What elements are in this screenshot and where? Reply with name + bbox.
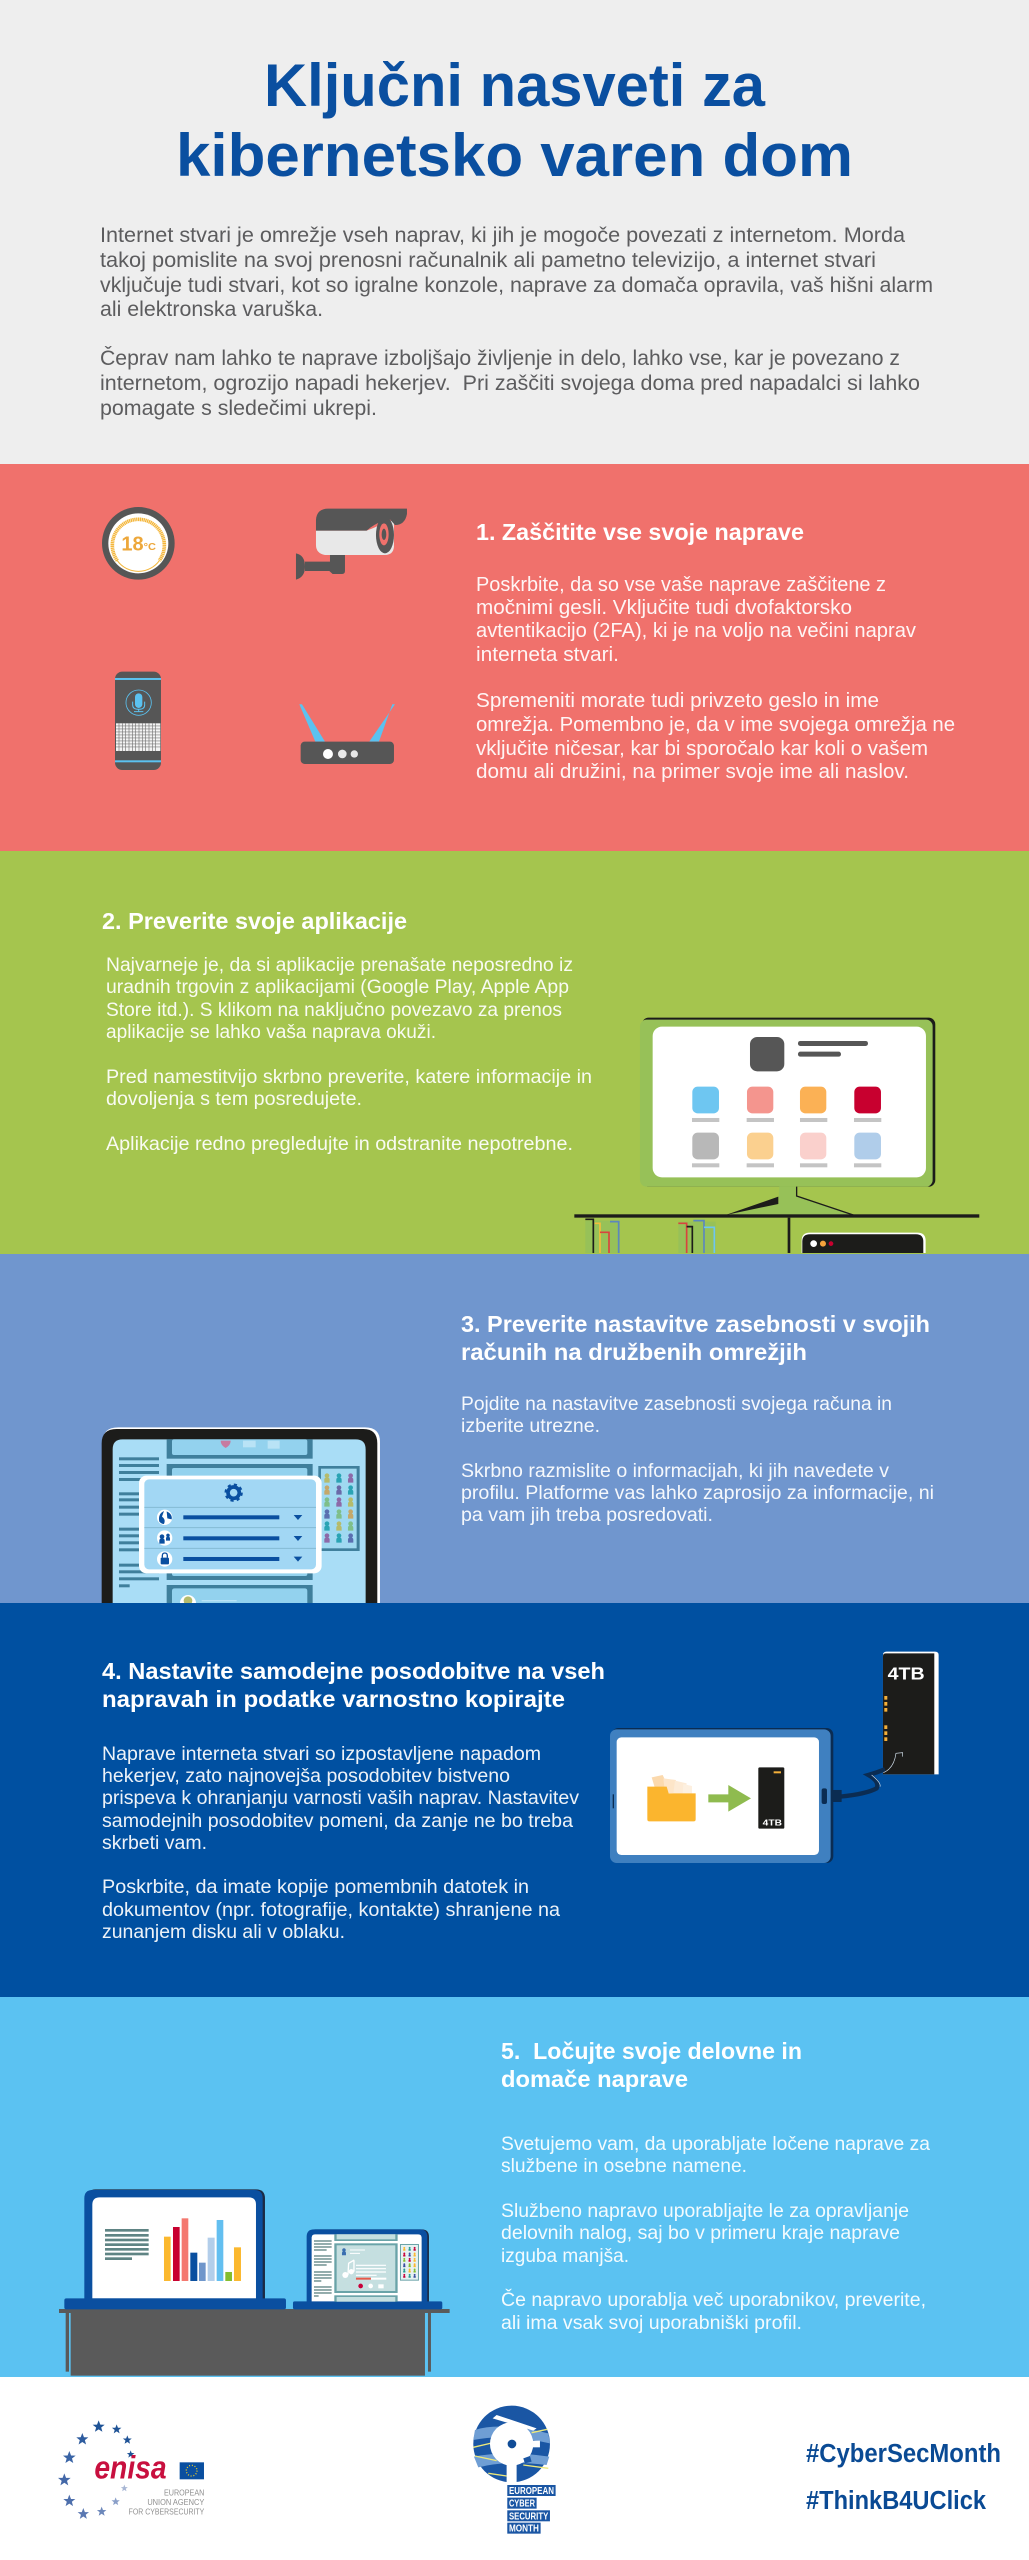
title: Ključni nasveti za (264, 52, 766, 119)
text block 2: aplikacije se lahko vaša naprava okuži. (106, 1022, 436, 1043)
title: kibernetsko varen dom (176, 122, 853, 189)
hashtags: #CyberSecMonth (806, 2440, 1001, 2468)
text block 2: Najvarneje je, da si aplikacije prenašate neposredno iz (106, 955, 573, 976)
heading 5 (501, 2038, 802, 2092)
intro text: Čeprav nam lahko te naprave izboljšajo življenje in delo, lahko vse, kar je povezano z (100, 347, 900, 370)
text block 5: službene in osebne namene. (501, 2156, 747, 2177)
icon: thermostat (102, 507, 175, 580)
panel: introduction (0, 0, 1029, 464)
panel: footer (0, 2377, 1029, 2560)
illustration: tablet backing up to external drive (610, 1652, 939, 1863)
text block 1: Poskrbite, da so vse vaše naprave zaščitene z (476, 574, 886, 596)
text block 4: dokumentov (npr. fotografije, kontakte) shranjene na (102, 1900, 560, 1921)
text block 4: zunanjem disku ali v oblaku. (102, 1922, 345, 1943)
panel: 4 automatic updates and backup (0, 1603, 1029, 1997)
icon: smart speaker (115, 672, 161, 770)
intro text: internetom, ogrozijo napadi hekerjev. Pri zaščiti svojega doma pred napadalci si lahko (100, 372, 920, 395)
heading 4: napravah in podatke varnostno kopirajte (102, 1686, 565, 1712)
text block 5: ali ima vsak svoj uporabniški profil. (501, 2313, 802, 2334)
illustration: tablet with privacy settings (102, 1427, 380, 1605)
text block 1: omrežja. Pomembno je, da v ime svojega omrežja ne (476, 714, 955, 736)
logo: European Cyber Security Month (473, 2406, 556, 2535)
panel: 3 privacy settings (0, 1254, 1029, 1605)
text block 1: močnimi gesli. Vključite tudi dvofaktorsko (476, 597, 852, 619)
text block 4: skrbeti vam. (102, 1833, 207, 1854)
heading 5: 5. Ločujte svoje delovne in (501, 2038, 802, 2064)
text block 2: dovoljenja s tem posredujete. (106, 1089, 362, 1110)
panel: 2 check apps (0, 851, 1029, 1254)
text block 5: delovnih nalog, saj bo v primeru kraje naprave (501, 2223, 900, 2244)
text block 3: profilu. Platforme vas lahko zaprosijo za informacije, ni (461, 1483, 934, 1504)
text block 2: uradnih trgovin z aplikacijami (Google Play, Apple App (106, 977, 569, 998)
text block 1: vključite ničesar, kar bi sporočalo kar koli o vašem (476, 738, 928, 760)
text block 4: prispeva k ohranjanju varnosti vaših naprav. Nastavitev (102, 1788, 580, 1809)
text block 5: Svetujemo vam, da uporabljate ločene naprave za (501, 2134, 930, 2155)
intro text: ali elektronska varuška. (100, 298, 323, 321)
intro text: vključuje tudi stvari, kot so igralne konzole, naprave za domača opravila, vaš hišni alarm (100, 274, 933, 297)
illustration: tablet backing up to external drive: 4TB (888, 1663, 925, 1683)
icon: security camera (296, 509, 407, 580)
text block 5: Službeno napravo uporabljajte le za opravljanje (501, 2201, 909, 2222)
text block 3 (461, 1394, 934, 1526)
hashtags: #ThinkB4UClick (806, 2487, 987, 2515)
icon: thermostat: 18 (121, 534, 144, 556)
heading 4 (102, 1658, 605, 1712)
heading 5: domače naprave (501, 2066, 688, 2092)
illustration: monitor with apps on shelf (574, 1018, 979, 1253)
logo: ENISA: enisa (94, 2449, 167, 2486)
logo: ENISA: EUROPEAN (164, 2487, 204, 2497)
heading 3 (461, 1311, 930, 1365)
heading 3: 3. Preverite nastavitve zasebnosti v svojih (461, 1311, 930, 1337)
text block 1: domu ali družini, na primer svoje ime ali naslov. (476, 761, 909, 783)
text block 1: Spremeniti morate tudi privzeto geslo in ime (476, 690, 879, 712)
intro text: takoj pomislite na svoj prenosni računalnik ali pametno televizijo, a internet stvari (100, 249, 876, 272)
text block 1: avtentikacijo (2FA), ki je na voljo na večini naprav (476, 620, 916, 642)
text block 2 (106, 955, 592, 1155)
intro text (100, 224, 933, 420)
intro text: pomagate s sledečimi ukrepi. (100, 397, 377, 420)
heading 2: 2. Preverite svoje aplikacije (102, 908, 407, 934)
text block 1: interneta stvari. (476, 644, 619, 666)
logo: European Cyber Security Month: EUROPEAN (509, 2486, 554, 2497)
text block 3: pa vam jih treba posredovati. (461, 1505, 713, 1526)
heading 4: 4. Nastavite samodejne posodobitve na vseh (102, 1658, 605, 1684)
logo: European Cyber Security Month: CYBER (509, 2499, 535, 2510)
hashtags (806, 2440, 1001, 2515)
text block 4: Naprave interneta stvari so izpostavljene napadom (102, 1744, 541, 1765)
text block 1 (476, 574, 955, 783)
text block 5: izguba manjša. (501, 2246, 629, 2267)
illustration: two laptops on a desk (59, 2189, 450, 2376)
logo: ENISA: UNION AGENCY (147, 2497, 204, 2507)
text block 3: Skrbno razmislite o informacijah, ki jih navedete v (461, 1461, 890, 1482)
icon: router (299, 704, 395, 764)
panel: 1 protect devices (0, 464, 1029, 851)
panel: 5 separate work and home devices (0, 1997, 1029, 2377)
text block 2: Pred namestitvijo skrbno preverite, katere informacije in (106, 1067, 592, 1088)
logo: European Cyber Security Month: SECURITY (509, 2511, 549, 2522)
text block 4: samodejnih posodobitev pomeni, da zanje ne bo treba (102, 1811, 573, 1832)
text block 5 (501, 2134, 930, 2334)
text block 3: izberite utrezne. (461, 1416, 600, 1437)
text block 2: Aplikacije redno pregledujte in odstranite nepotrebne. (106, 1134, 573, 1155)
text block 5: Če napravo uporablja več uporabnikov, preverite, (501, 2289, 926, 2311)
logo: ENISA: FOR CYBERSECURITY (129, 2507, 204, 2517)
illustration: tablet backing up to external drive: 4TB (763, 1818, 782, 1828)
text block 4 (102, 1744, 580, 1943)
heading 1: 1. Zaščitite vse svoje naprave (476, 519, 804, 545)
text block 2: Store itd.). S klikom na naključno povezavo za prenos (106, 1000, 562, 1021)
logo: ENISA (58, 2420, 204, 2519)
text block 3: Pojdite na nastavitve zasebnosti svojega računa in (461, 1394, 892, 1415)
intro text: Internet stvari je omrežje vseh naprav, ki jih je mogoče povezati z internetom. Morda (100, 224, 905, 247)
heading 3: računih na družbenih omrežjih (461, 1339, 807, 1365)
text block 4: hekerjev, zato najnovejša posodobitev bistveno (102, 1766, 510, 1787)
text block 4: Poskrbite, da imate kopije pomembnih datotek in (102, 1877, 529, 1898)
title (176, 52, 853, 189)
icon: thermostat: °C (144, 542, 157, 553)
logo: European Cyber Security Month: MONTH (509, 2524, 539, 2535)
